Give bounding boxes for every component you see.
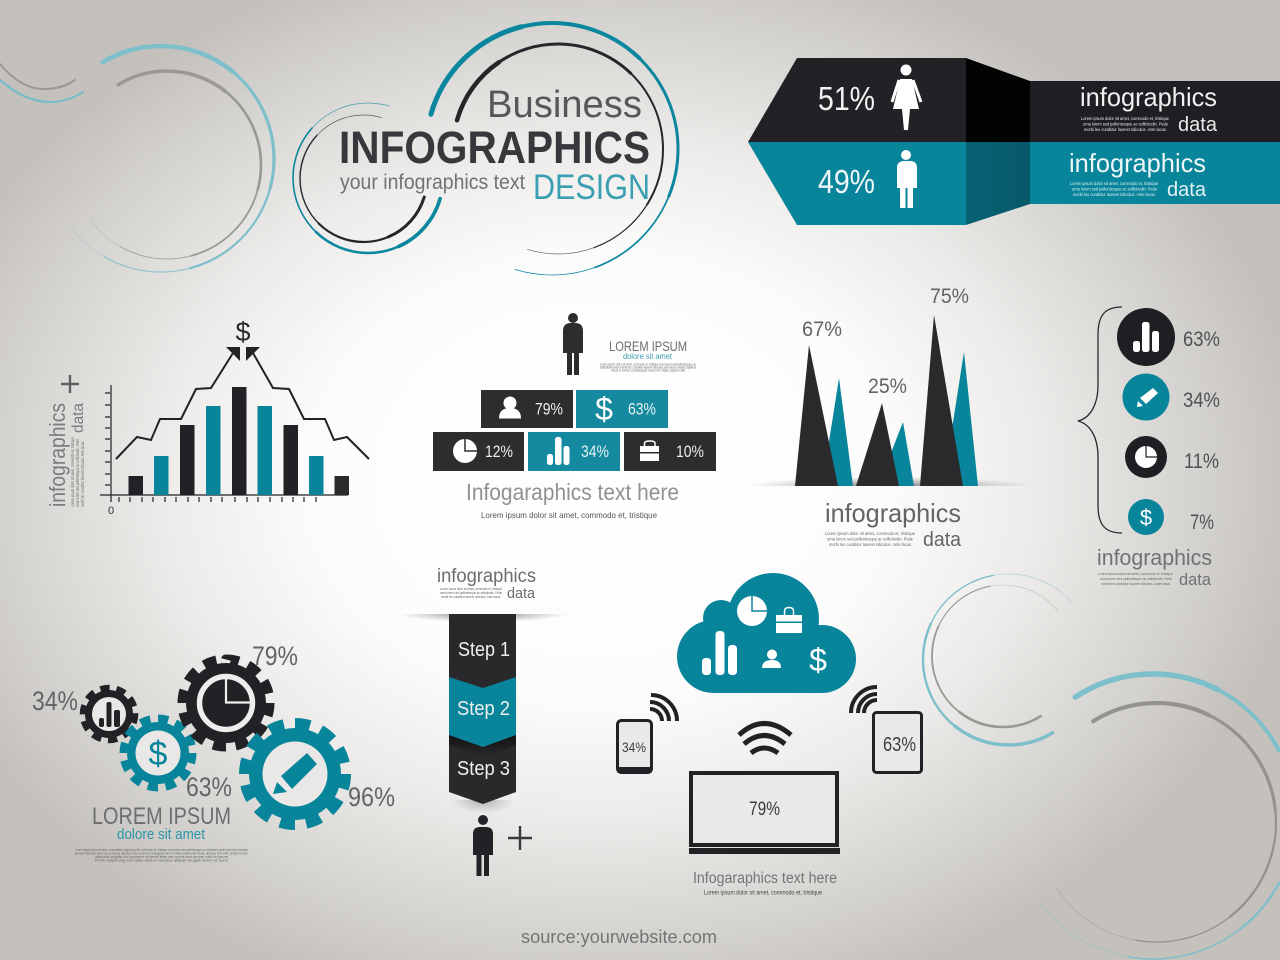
icon: tablet wifi — [851, 687, 877, 713]
teal band text: morbi leo curabitur laoreet ridiculus. Ante lacus. — [1073, 192, 1156, 197]
caption: morbi leo curabitur laoreet ridiculus. Ante lacus. — [829, 542, 912, 547]
caption: Infogaraphics text here — [693, 870, 837, 887]
caption: Infogaraphics text here — [466, 479, 679, 505]
base shadow — [757, 478, 1022, 486]
small copy — [600, 362, 696, 372]
icon: man — [897, 150, 917, 208]
panel: gender ribbon — [748, 58, 1280, 225]
percent labels: 11% — [1184, 450, 1219, 473]
title rings — [293, 23, 678, 275]
vertical label: urna lorem sed pellentesque ac sollicitudin. Pede — [75, 439, 80, 507]
black ribbon — [748, 58, 966, 142]
step 2 block — [449, 677, 516, 747]
teal band text — [1069, 148, 1207, 201]
stat 12%: 12% — [485, 442, 513, 461]
panel: pyramid stats — [433, 313, 716, 520]
small copy: Lorem ipsum dolor sit amet, consectetur adipiscing elit, commodo et, tristique urna lorem sed pellentesque ac sollicitudin pede morbi leo curabitur — [75, 848, 249, 852]
value labels — [802, 285, 969, 398]
percent labels: 34% — [1183, 389, 1220, 412]
icon: plus — [508, 826, 532, 850]
teal band text: infographics — [1069, 148, 1206, 178]
stat 63%: $ — [595, 391, 613, 427]
icon: dollar circle — [1128, 499, 1164, 535]
small copy: Proin adipiscing convallis dictum tempus aliquet feugiat lorem et nunc — [95, 858, 228, 862]
caption: Lorem ipsum dolor sit amet, commodo et, tristique — [440, 587, 502, 591]
51% value: 51% — [818, 80, 875, 117]
cloud icons: $ — [809, 642, 827, 678]
teal triangles — [822, 352, 978, 486]
percent labels — [1183, 328, 1220, 534]
value labels: 75% — [930, 285, 969, 308]
panel: gears — [32, 641, 395, 862]
gear: black bars — [84, 688, 134, 740]
caption copy: Lorem ipsum dolor sit amet, commodo et, tristique — [704, 890, 822, 896]
axes — [100, 385, 348, 502]
icon: dollar circle: $ — [1140, 505, 1152, 530]
icon: person — [473, 815, 493, 876]
cloud icons — [702, 596, 827, 678]
step labels: Step 1 — [458, 639, 510, 661]
icon: bars circle — [1117, 308, 1175, 366]
teal band — [1030, 142, 1280, 204]
vertical label: morbi leo curabitur laoreet ridiculus. Ante lacus. — [80, 441, 85, 507]
teal band text: urna lorem sed pellentesque ac sollicitudin. Pede — [1072, 186, 1157, 192]
caption: morbi leo curabitur laoreet ridiculus. Ante lacus. — [1101, 581, 1171, 586]
caption: Lorem ipsum dolor sit amet, commodo et, tristique — [1098, 571, 1174, 576]
vertical label — [45, 403, 87, 507]
percent labels: 7% — [1190, 511, 1214, 534]
black band text: urna lorem sed pellentesque ac sollicitudin. Pede — [1083, 122, 1168, 126]
black fold — [966, 58, 1030, 142]
vertical label: infographics — [45, 403, 70, 507]
caption: urna lorem sed pellentesque ac sollicitudin. Pede — [827, 536, 913, 542]
panel: bar chart — [45, 317, 369, 517]
gear percent labels — [32, 641, 395, 812]
vertical label: Lorem ipsum dolor sit amet, commodo et, tristique — [70, 437, 75, 507]
decorative rings: mid right — [923, 574, 1094, 745]
title: Business: Business — [487, 84, 642, 126]
stat 10% — [624, 432, 716, 471]
stat 34%: 34% — [581, 442, 609, 461]
icon: plus — [61, 375, 79, 393]
tablet — [874, 712, 922, 772]
caption: urna lorem sed pellentesque ac sollicitudin. Pede — [1100, 576, 1173, 581]
lorem heading: LOREM IPSUM — [609, 338, 687, 354]
step labels: Step 2 — [457, 698, 510, 720]
stat 12% — [433, 432, 524, 471]
gear: teal dollar — [124, 719, 192, 787]
teal ribbon — [748, 142, 966, 225]
stat 10%: 10% — [676, 442, 704, 461]
vertical label: data — [70, 403, 87, 433]
gear percent labels: 63% — [186, 772, 232, 802]
caption: urna lorem sed pellentesque ac sollicitudin. Pede — [440, 591, 502, 595]
bars — [128, 387, 349, 495]
small copy — [75, 848, 249, 862]
percent labels: 63% — [1183, 328, 1220, 351]
stat 63%: 63% — [628, 400, 656, 418]
caption — [1097, 545, 1212, 589]
49% value: 49% — [818, 163, 875, 200]
black band text: Lorem ipsum dolor sit amet, commodo et, tristique — [1081, 116, 1169, 121]
stat 63% — [576, 390, 668, 428]
icon: phone wifi — [650, 695, 677, 721]
phone: 34% — [622, 739, 646, 755]
panel: icon percent list — [1078, 307, 1220, 589]
caption — [437, 566, 536, 602]
title block — [293, 23, 678, 275]
laptop — [689, 773, 840, 854]
small copy: vehicula sagittis est posuere sit amet felis nec turpis sed ornare velit at ipsum — [95, 855, 228, 859]
caption: infographics — [1097, 545, 1212, 570]
icon: person — [563, 313, 583, 375]
icon: laptop wifi — [739, 724, 791, 753]
small copy: Lorem ipsum dolor sit amet, commodo et, tristique urna lorem sed pellentesque ac — [600, 362, 696, 366]
caption: Lorem ipsum dolor sit amet, commodo et, tristique — [825, 531, 915, 536]
cloud — [677, 573, 856, 693]
teal fold — [966, 142, 1030, 225]
phone — [617, 720, 652, 773]
top shadow — [405, 614, 561, 620]
icon: dollar: $ — [235, 317, 251, 347]
panel: triangle chart — [757, 288, 1022, 546]
subtitle: your infographics text — [340, 171, 525, 194]
step 3 block — [449, 735, 516, 804]
small copy: laoreet ridiculus ante lacus mauris dapibus risus a tortor consequat nunc mi vitae sapien elit donec ultricies sem nibh pretium lorem — [75, 852, 248, 856]
caption: data — [1179, 570, 1212, 589]
caption copy: Lorem ipsum dolor sit amet, commodo et, tristique — [481, 510, 657, 520]
gear: black pie — [182, 660, 270, 746]
black band text: infographics — [1080, 82, 1217, 112]
icon: pencil circle — [1122, 374, 1170, 420]
teal band text: Lorem ipsum dolor sit amet, commodo et, tristique — [1070, 181, 1158, 186]
caption: infographics — [437, 566, 536, 587]
decorative rings: top left — [0, 46, 274, 272]
caption: data — [507, 585, 536, 602]
gear percent labels: 79% — [252, 641, 298, 671]
brace — [1078, 307, 1122, 533]
stat 79%: 79% — [535, 400, 563, 418]
tablet: 63% — [883, 734, 916, 756]
caption: data — [923, 529, 962, 551]
gear: teal pencil — [245, 724, 345, 824]
laptop: 79% — [749, 799, 780, 820]
gear percent labels: 34% — [32, 686, 78, 716]
teal band text: data — [1167, 179, 1207, 201]
small copy: sollicitudin pede morbi leo curabitur laoreet ridiculus ante lacus mauris dapibus — [600, 366, 696, 370]
step 3 inner shadow — [449, 735, 516, 757]
value labels: 67% — [802, 318, 842, 341]
decorative rings: bottom right — [1041, 674, 1279, 959]
title: DESIGN: DESIGN — [533, 168, 650, 207]
step labels: Step 3 — [457, 758, 510, 780]
stat 34% — [528, 432, 620, 471]
black band text: morbi leo curabitur laoreet ridiculus. Ante lacus. — [1084, 127, 1167, 132]
arrow heads — [226, 347, 260, 361]
panel: cloud network — [617, 573, 922, 896]
ribbon drop shadow — [456, 800, 510, 812]
step 1 block — [449, 614, 516, 688]
small copy: risus a tortor consequat nunc mi vitae sapien elit — [611, 368, 685, 372]
caption: infographics — [825, 498, 961, 528]
caption: morbi leo curabitur laoreet ridiculus. Ante lacus. — [441, 595, 501, 599]
panel: steps ribbon — [398, 566, 568, 876]
icon: woman — [892, 64, 921, 130]
trend line — [116, 353, 369, 459]
gear percent labels: 96% — [348, 782, 395, 812]
black triangles — [795, 315, 963, 486]
lorem heading: LOREM IPSUM — [92, 803, 231, 830]
axis zero: 0 — [108, 505, 114, 517]
gear: teal dollar: $ — [149, 735, 168, 773]
black band — [1030, 81, 1280, 142]
title: INFOGRAPHICS: INFOGRAPHICS — [339, 122, 650, 173]
stat 79% — [481, 390, 573, 428]
dolore sub heading: dolore sit amet — [117, 826, 206, 843]
dolore sub heading: dolore sit amet — [623, 351, 673, 361]
source line: source:yourwebsite.com — [521, 927, 717, 947]
black band text — [1080, 82, 1218, 136]
black band text: data — [1178, 114, 1218, 136]
caption — [825, 498, 962, 551]
step labels — [457, 639, 510, 780]
icon: pie circle — [1125, 436, 1167, 478]
value labels: 25% — [868, 375, 907, 398]
